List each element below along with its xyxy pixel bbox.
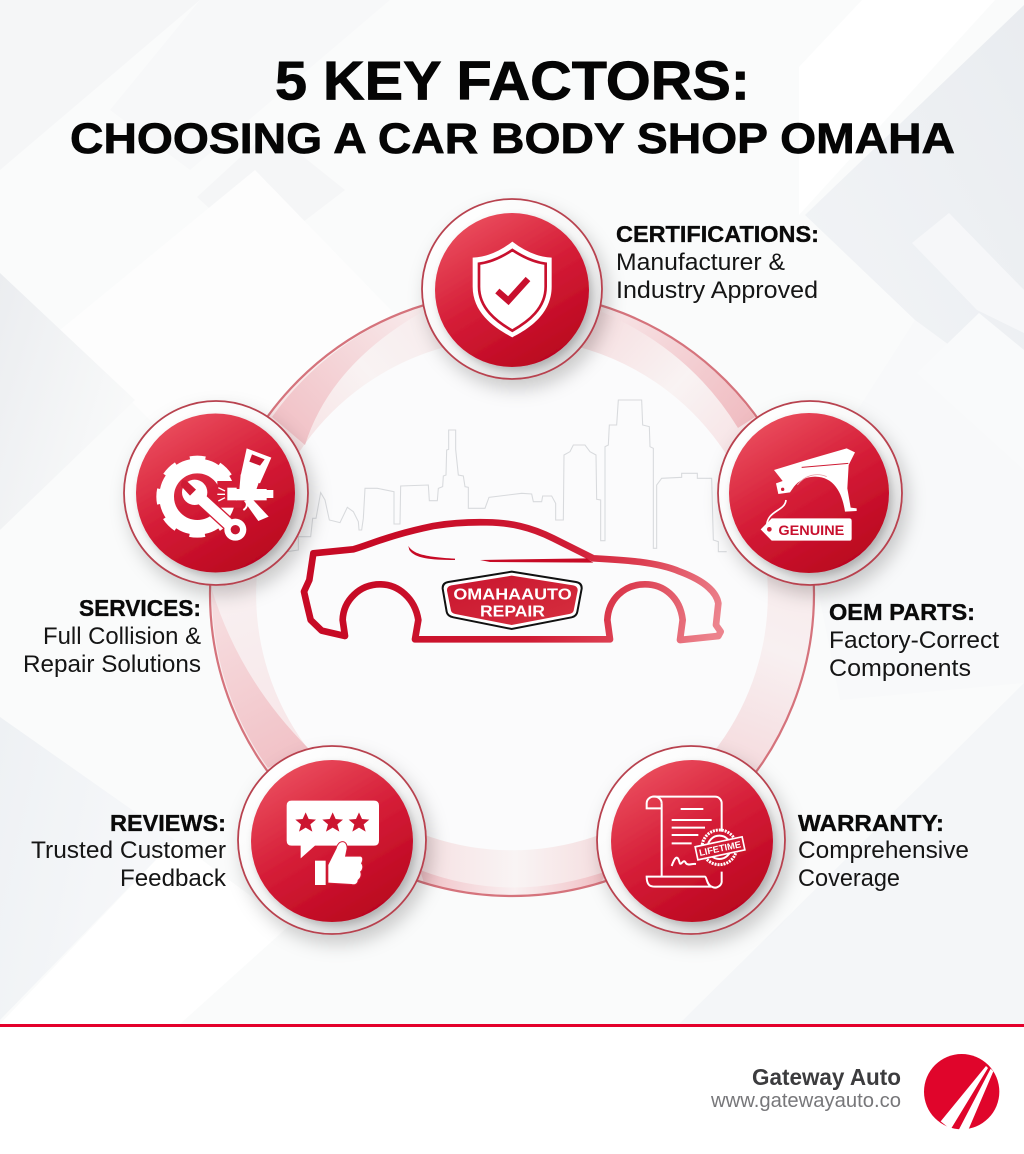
- node: reviews: [238, 746, 426, 934]
- label: warranty: [798, 810, 969, 892]
- label: certifications: CERTIFICATIONS:: [616, 221, 819, 247]
- badge: OMAHAAUTO: [453, 586, 572, 603]
- title: 5 KEY FACTORS:: [275, 50, 750, 112]
- label: warranty: Comprehensive: [798, 837, 969, 864]
- icon: fender with genuine tag: [761, 448, 857, 541]
- title: [70, 50, 955, 163]
- icon: shield with check: [473, 242, 552, 337]
- node: certifications: [422, 199, 602, 379]
- label: reviews: REVIEWS:: [110, 810, 226, 836]
- footer brand text: www.gatewayauto.co: [710, 1090, 901, 1112]
- label: OEM parts: OEM PARTS:: [829, 599, 975, 625]
- label: certifications: Industry Approved: [616, 277, 818, 304]
- title: CHOOSING A CAR BODY SHOP OMAHA: [70, 115, 955, 163]
- label: services: [23, 595, 201, 678]
- icon: stars and thumbs up: [287, 801, 379, 885]
- icon: gear, wrench and spray gun: [161, 448, 273, 541]
- label: services: Full Collision &: [43, 623, 201, 650]
- badge: [443, 572, 582, 629]
- door line: [480, 558, 593, 563]
- skyline outline: [287, 400, 727, 552]
- label: services: Repair Solutions: [23, 651, 201, 678]
- footer brand text: Gateway Auto: [752, 1064, 901, 1090]
- windshield line: [408, 546, 455, 560]
- footer red rule: [0, 1024, 1024, 1027]
- label: warranty: Coverage: [798, 865, 900, 892]
- icon: fender with genuine tag: GENUINE: [778, 522, 844, 538]
- label: warranty: WARRANTY:: [798, 810, 944, 836]
- node: OEM parts: [718, 401, 902, 585]
- node: services: [124, 401, 308, 585]
- label: OEM parts: Components: [829, 655, 971, 682]
- ring connecting the five factors: [210, 292, 814, 896]
- icon: warranty scroll with stamp: [647, 797, 745, 888]
- badge: REPAIR: [480, 604, 545, 621]
- label: certifications: [616, 221, 819, 304]
- label: reviews: Feedback: [120, 865, 227, 892]
- label: OEM parts: Factory-Correct: [829, 627, 999, 654]
- icon: warranty scroll with stamp: LIFETIME: [698, 839, 742, 858]
- label: certifications: Manufacturer &: [616, 249, 785, 276]
- label: reviews: Trusted Customer: [31, 837, 226, 864]
- label: OEM parts: [829, 599, 999, 682]
- label: services: SERVICES:: [79, 595, 201, 621]
- footer brand text: [710, 1064, 901, 1112]
- label: reviews: [31, 810, 227, 892]
- footer white band: [0, 1027, 1024, 1154]
- footer logo: [924, 1054, 999, 1131]
- node: warranty: [597, 746, 785, 934]
- car outline with badge: [304, 522, 721, 640]
